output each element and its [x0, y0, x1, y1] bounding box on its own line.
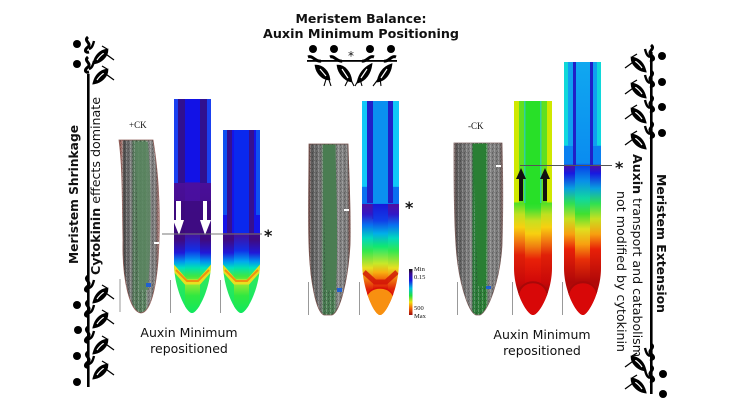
axis line left	[87, 74, 90, 387]
marker line and star	[162, 226, 273, 245]
heat map short	[221, 130, 262, 313]
heat map tall blue	[564, 62, 601, 320]
title: Auxin Minimum Positioning	[263, 26, 459, 41]
icon: bottom right figures	[625, 344, 667, 398]
arrow: white down right	[200, 201, 211, 235]
icon: top left figures	[73, 37, 114, 83]
scale bars right	[512, 282, 563, 315]
marker line and star: *	[264, 226, 273, 245]
caption: auxin minimum repositioned left: Auxin Minimum	[140, 325, 238, 340]
colour legend	[409, 266, 427, 320]
colour legend: 0.15	[414, 274, 425, 281]
text: not modified by cytokinin: not modified by cytokinin	[614, 191, 628, 352]
colour legend: Max	[414, 313, 427, 320]
caption: auxin minimum repositioned right: repositioned	[503, 343, 581, 358]
title: Meristem Balance:	[296, 11, 426, 26]
root image left	[119, 140, 159, 313]
root image centre	[308, 144, 350, 315]
root image right	[454, 143, 503, 315]
text: auxin transport and catabolism: Auxin transport and catabolism	[630, 154, 644, 357]
scale bar centre	[359, 282, 360, 315]
star on rope: *	[348, 49, 354, 63]
marker line and star right	[520, 158, 624, 177]
colour legend: 500	[414, 305, 424, 312]
heading: Meristem Extension: Meristem Extension	[654, 174, 668, 313]
icon: tug of war figures	[307, 45, 397, 86]
colour legend: Min	[414, 266, 426, 273]
heat map tall	[172, 99, 213, 313]
arrow: black up left	[516, 168, 526, 201]
icon: bottom left figures	[73, 276, 114, 386]
axis line right	[650, 52, 653, 394]
panel: meristem balance	[263, 11, 459, 320]
marker line and star right: *	[615, 158, 624, 177]
heat map centre	[362, 101, 399, 320]
scale bars	[170, 280, 221, 313]
heat map green	[514, 101, 552, 320]
panel: minus cytokinin	[454, 62, 624, 358]
panel: plus cytokinin	[119, 99, 273, 356]
arrow: black up right	[540, 168, 550, 201]
label: -CK: -CK	[468, 121, 484, 131]
caption: auxin minimum repositioned right: Auxin Minimum	[493, 327, 591, 342]
label: +CK: +CK	[129, 120, 147, 130]
text: cytokinin effects dominate: Cytokinin effects dominate	[89, 97, 103, 275]
caption: auxin minimum repositioned left: repositioned	[150, 341, 228, 356]
arrow: white down left	[173, 201, 184, 235]
star marker centre: *	[405, 198, 414, 217]
icon: top right figures	[625, 45, 666, 148]
panel: meristem shrinkage side axis	[67, 37, 114, 387]
heading: Meristem Shrinkage: Meristem Shrinkage	[67, 125, 81, 264]
panel: meristem extension side axis	[614, 45, 668, 398]
